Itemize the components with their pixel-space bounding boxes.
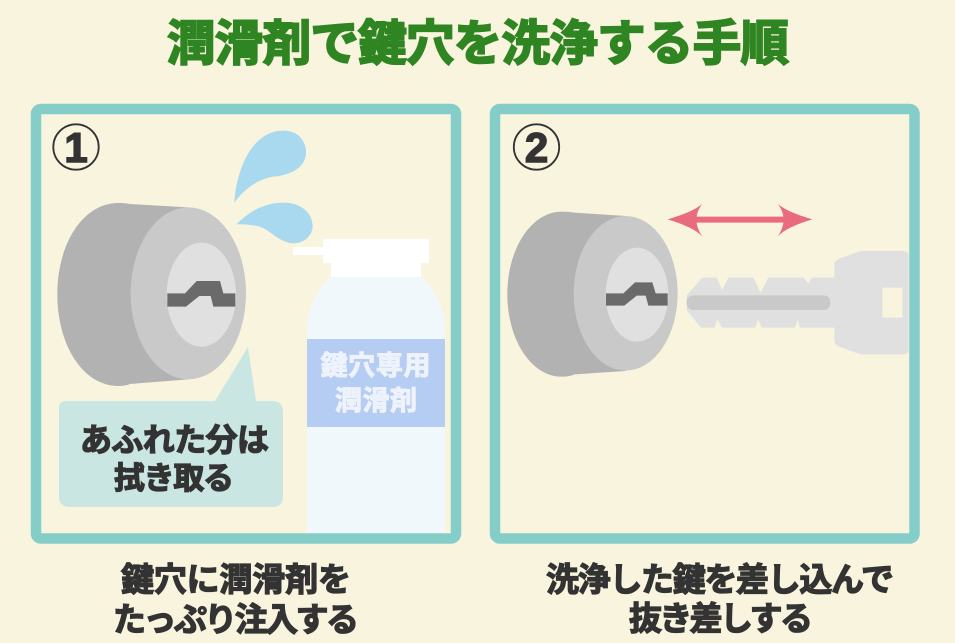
caption: step 1: 鍵穴に潤滑剤を [121,561,351,598]
can nozzle and cap [293,239,429,277]
step number 2 [514,124,559,171]
can label text: 潤滑剤 [335,386,417,416]
icon: lubricant drops [234,131,313,243]
can label text: 鍵穴専用 [320,351,430,381]
can label [307,339,445,427]
panel: step 1 [36,109,456,538]
lubricant spray can [293,239,445,533]
panel frame 1 [36,109,456,538]
callout [59,347,283,507]
panel frame 2 [495,109,914,538]
callout: あふれた分は [80,422,269,458]
step number 2: 2 [525,124,548,171]
title: 潤滑剤で鍵穴を洗浄する手順 [167,17,789,71]
can label text [320,351,430,416]
icon: key cylinder [507,212,678,377]
caption: step 2: 抜き差しする [629,600,813,637]
callout: 拭き取る [114,461,234,496]
icon: key cylinder [57,203,246,386]
panel: step 2 [495,109,914,538]
arrow: back and forth [668,203,812,237]
caption: step 2 [546,561,894,637]
caption: step 2: 洗浄した鍵を差し込んで [546,561,894,598]
step number 1 [53,124,99,171]
can body [307,277,445,533]
caption: step 1: たっぷり注入する [113,601,359,638]
icon: key [687,251,909,354]
caption: step 1 [113,561,359,638]
step number 1: 1 [64,124,88,171]
